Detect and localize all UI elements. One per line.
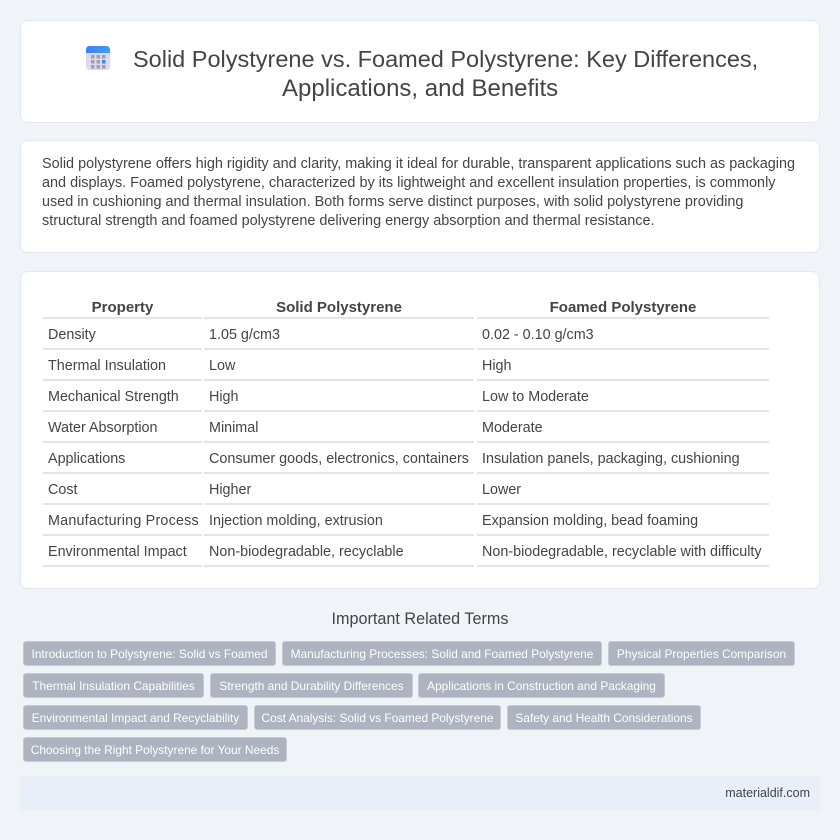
comparison table: Low xyxy=(209,358,235,374)
comparison table: Low to Moderate xyxy=(482,389,589,405)
title: Applications, and Benefits xyxy=(282,75,558,102)
intro panel xyxy=(20,140,820,253)
related terms tags: Safety and Health Considerations xyxy=(515,711,693,725)
comparison table: Expansion molding, bead foaming xyxy=(482,513,698,529)
related terms tags: Choosing the Right Polystyrene for Your Needs xyxy=(31,743,279,757)
title: Solid Polystyrene vs. Foamed Polystyrene: Key Differences, xyxy=(133,46,758,72)
related terms tags: Applications in Construction and Packaging xyxy=(427,679,656,693)
table header: Foamed Polystyrene xyxy=(550,299,696,316)
related terms tags: Manufacturing Processes: Solid and Foamed Polystyrene xyxy=(291,647,593,661)
intro text xyxy=(42,156,795,229)
table header: Solid Polystyrene xyxy=(276,299,402,316)
comparison table: Mechanical Strength xyxy=(48,389,179,405)
icon: calendar grid xyxy=(86,46,110,70)
comparison table: Cost xyxy=(48,482,78,498)
footer bar xyxy=(20,776,820,810)
comparison table: Lower xyxy=(482,482,521,498)
intro text: used in cushioning and thermal insulation. Both forms serve distinct purposes, with solid polystyrene providing xyxy=(42,194,743,210)
intro text: and displays. Foamed polystyrene, characterized by its lightweight and excellent insulation properties, is commonly xyxy=(42,175,775,191)
comparison table: Insulation panels, packaging, cushioning xyxy=(482,451,740,467)
related terms tags: Physical Properties Comparison xyxy=(617,647,786,661)
comparison table: Consumer goods, electronics, containers xyxy=(209,451,469,467)
comparison table: Non-biodegradable, recyclable with difficulty xyxy=(482,544,762,560)
footer source: materialdif.com xyxy=(725,786,810,800)
comparison table: 1.05 g/cm3 xyxy=(209,327,280,343)
related terms tags: Cost Analysis: Solid vs Foamed Polystyrene xyxy=(262,711,493,725)
comparison table: High xyxy=(482,358,512,374)
related terms tags: Strength and Durability Differences xyxy=(219,679,404,693)
comparison table xyxy=(43,299,769,567)
intro text: structural strength and foamed polystyrene delivering energy absorption and thermal resistance. xyxy=(42,213,654,229)
comparison table: 0.02 - 0.10 g/cm3 xyxy=(482,327,594,343)
comparison table: Moderate xyxy=(482,420,543,436)
comparison table: Higher xyxy=(209,482,251,498)
comparison table: Injection molding, extrusion xyxy=(209,513,383,529)
table header: Property xyxy=(92,299,153,316)
comparison table: Minimal xyxy=(209,420,258,436)
header panel xyxy=(20,20,820,123)
related terms heading: Important Related Terms xyxy=(332,610,508,628)
intro text: Solid polystyrene offers high rigidity and clarity, making it ideal for durable, transparent applications such as packaging xyxy=(42,156,795,172)
comparison table: High xyxy=(209,389,238,405)
related terms tags: Environmental Impact and Recyclability xyxy=(32,711,239,725)
title xyxy=(133,46,758,102)
comparison table: Environmental Impact xyxy=(48,544,187,560)
table panel xyxy=(20,271,820,589)
table header xyxy=(92,299,696,316)
comparison table: Water Absorption xyxy=(48,420,158,436)
comparison table: Manufacturing Process xyxy=(48,513,199,529)
related terms tags: Thermal Insulation Capabilities xyxy=(32,679,195,693)
comparison table: Density xyxy=(48,327,96,343)
comparison table: Applications xyxy=(48,451,125,467)
comparison table: Thermal Insulation xyxy=(48,358,166,374)
related terms tags: Introduction to Polystyrene: Solid vs Foamed xyxy=(32,647,267,661)
related terms tags xyxy=(23,641,795,762)
comparison table: Non-biodegradable, recyclable xyxy=(209,544,404,560)
